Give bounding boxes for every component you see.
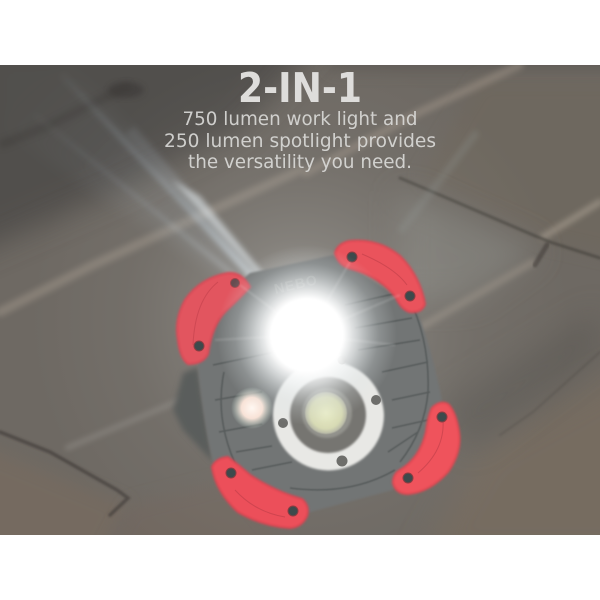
bumper: bottom-left [212, 457, 308, 528]
red bumpers [177, 241, 460, 528]
housing [198, 255, 442, 513]
spotlight beam [63, 87, 476, 278]
small side LED [231, 387, 273, 429]
paving joints and light bands [0, 65, 600, 515]
description: 750 lumen work light and [182, 108, 418, 130]
description: 250 lumen spotlight provides [164, 130, 436, 152]
description [164, 108, 436, 173]
COB emitter [305, 392, 347, 434]
description: the versatility you need. [188, 151, 412, 173]
bumper screws [194, 252, 447, 516]
NEBO logo: NEBO [272, 271, 319, 297]
housing ribs [213, 292, 430, 490]
bumper: top-left [177, 273, 250, 364]
bumper: bottom-right [393, 403, 460, 494]
ring screws [278, 356, 381, 466]
photo panel: paved stone background [0, 65, 600, 535]
text block: headline and description [164, 64, 436, 173]
stone paving tones [0, 65, 600, 535]
inner bezel [290, 377, 366, 453]
rear stand [173, 367, 213, 462]
spotlight glare [215, 245, 400, 425]
COB lens ring [272, 362, 386, 472]
bumper: top-right [335, 241, 425, 312]
work light: NEBO unit [173, 241, 460, 528]
infographic: full canvas [0, 65, 600, 535]
title: 2-IN-1 [238, 64, 362, 112]
light haze [140, 160, 461, 400]
